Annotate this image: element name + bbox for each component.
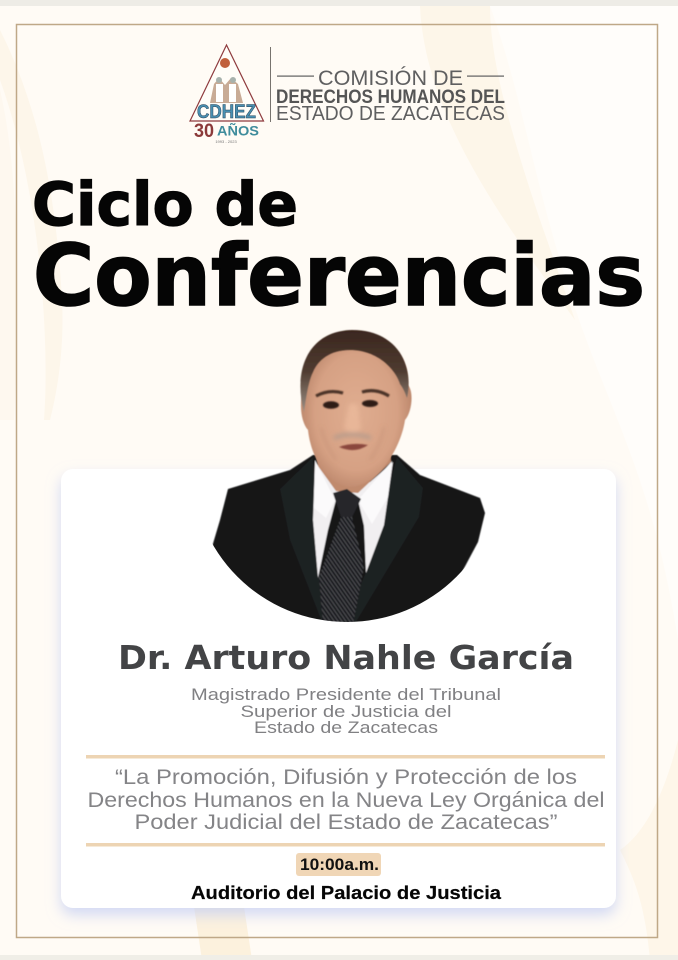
conference topic: Poder Judicial del Estado de Zacatecas” [134, 811, 558, 834]
conference topic [88, 766, 604, 834]
panel: speaker card [61, 469, 616, 908]
head [301, 331, 412, 487]
tie [333, 489, 361, 517]
30 años anniversary mark: AÑOS [217, 122, 259, 138]
30 años anniversary mark [194, 121, 259, 144]
shirt [313, 462, 393, 578]
logo: CDHEZ 30 años [190, 45, 505, 144]
logo divider [270, 47, 271, 122]
logo emblem triangle: CDHEZ [197, 102, 256, 123]
speaker name: Dr. Arturo Nahle García [118, 638, 574, 677]
title [32, 170, 645, 326]
facial features [316, 391, 389, 460]
30 años anniversary mark: 30 [194, 121, 214, 142]
suit [212, 454, 486, 622]
logo emblem triangle [190, 45, 264, 123]
institution name [276, 67, 505, 125]
30 años anniversary mark: 1993 - 2023 [215, 139, 237, 144]
neck [316, 456, 392, 494]
title: Conferencias [33, 227, 645, 326]
speaker role: Superior de Justicia del [240, 702, 452, 721]
conference topic: “La Promoción, Difusión y Protección de los [115, 766, 577, 789]
conference topic: Derechos Humanos en la Nueva Ley Orgánica del [88, 789, 604, 812]
speaker portrait [205, 330, 485, 640]
divider [86, 755, 605, 758]
title: Ciclo de [32, 170, 298, 240]
venue: Auditorio del Palacio de Justicia [191, 882, 502, 903]
institution name: COMISIÓN DE [318, 67, 463, 90]
institution name: ESTADO DE ZACATECAS [276, 102, 505, 125]
time badge: 10:00a.m. [300, 855, 379, 874]
speaker role [191, 685, 501, 737]
speaker role: Estado de Zacatecas [254, 718, 438, 737]
institution name: DERECHOS HUMANOS DEL [276, 87, 505, 108]
hair [300, 330, 409, 412]
divider [86, 843, 605, 846]
speaker role: Magistrado Presidente del Tribunal [191, 685, 501, 704]
